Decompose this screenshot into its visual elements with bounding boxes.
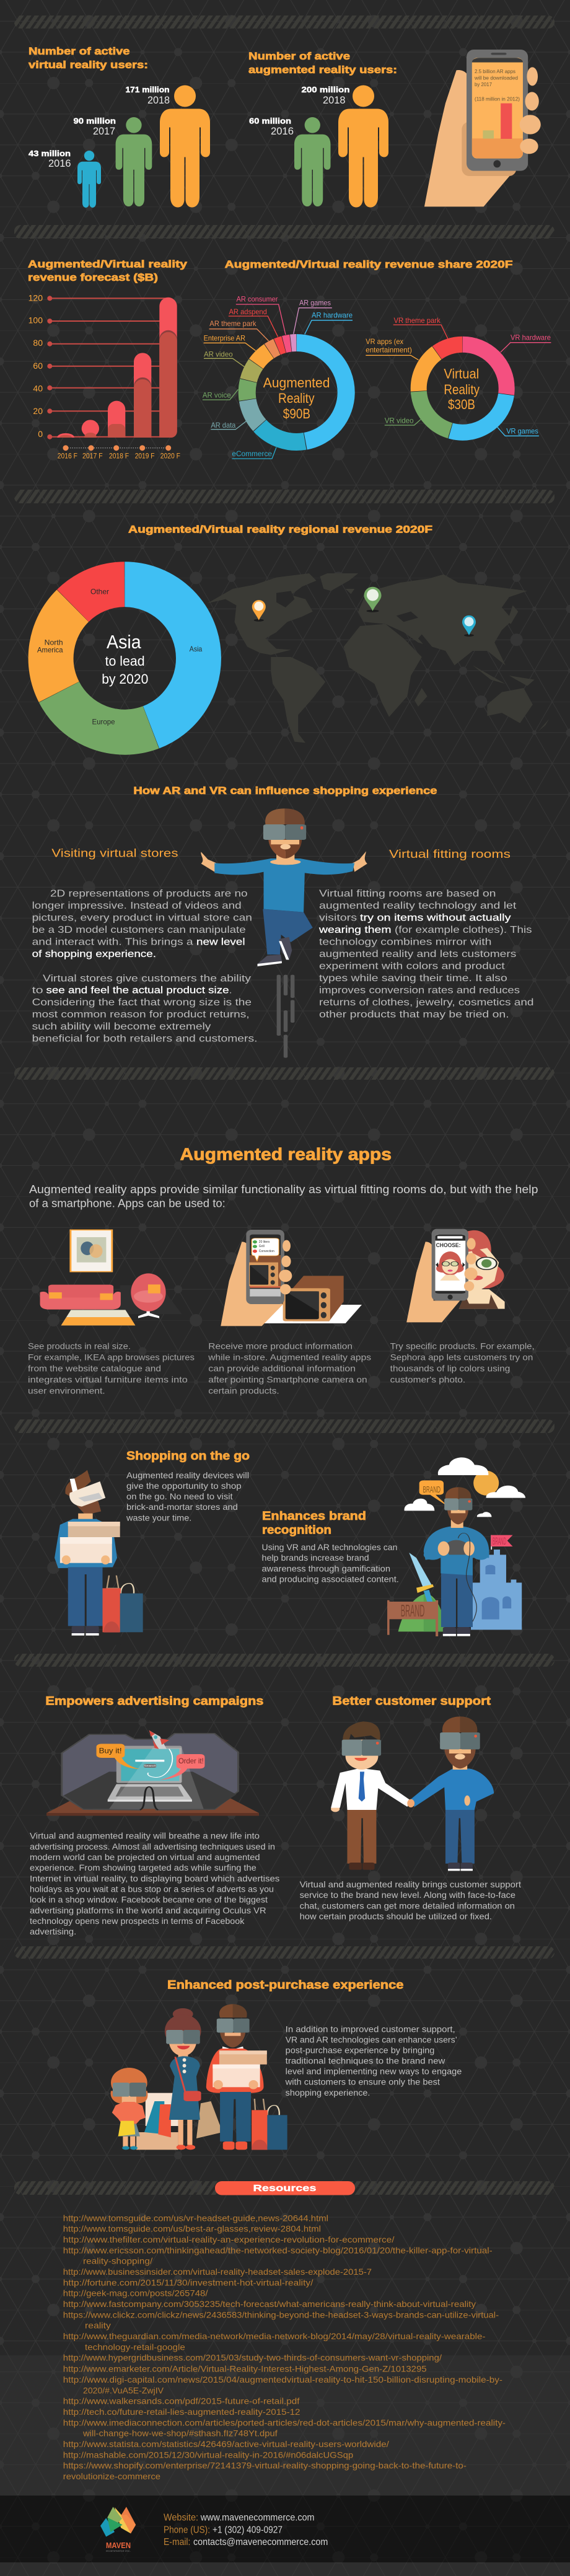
map pin: asia bbox=[462, 615, 476, 637]
text: virtual stores: new level bbox=[196, 937, 245, 947]
text: shopping on the go: Augmented reality devices will bbox=[126, 1470, 249, 1480]
text: try specific products: Try specific products. For example, bbox=[390, 1341, 535, 1351]
illustration: furniture in room bbox=[40, 1230, 182, 1325]
text: virtual stores bbox=[32, 889, 257, 1044]
logo: Maven ecommerce: ecommerce inc. bbox=[106, 2549, 131, 2552]
text: customer support: how certain products should be utilized or fixed. bbox=[300, 1912, 492, 1921]
chart: y axis labels: 40 bbox=[33, 383, 43, 393]
donut center: Augmented Reality $90B: $90B bbox=[283, 406, 310, 421]
ad bubble text: Search bbox=[144, 1764, 156, 1767]
list: resource links: revolutionize-commerce bbox=[63, 2471, 160, 2481]
logo: Maven ecommerce: MAVEN bbox=[106, 2541, 131, 2550]
panel: virtual reality users bbox=[28, 45, 210, 208]
text: see products in real size bbox=[28, 1341, 195, 1396]
text: shopping on the go: give the opportunity to shop bbox=[126, 1481, 242, 1491]
stat: 43 million 2016: 43 million bbox=[28, 149, 71, 158]
list: resource links: http://www.fastcompany.com/3053235/tech-forecast/what-americans-really-think-about-virtual-reality bbox=[63, 2299, 476, 2309]
chart: y axis labels: 60 bbox=[33, 361, 43, 371]
phone screen label: CHOOSE: bbox=[436, 1242, 461, 1248]
heading: enhances brand recognition bbox=[262, 1510, 366, 1537]
chart: augmented reality donut bbox=[227, 322, 367, 462]
text: post-purchase: with customers to ensure only the best bbox=[285, 2077, 440, 2087]
list: resource links: https://www.clickz.com/clickz/news/2436583/thinking-beyond-the-headset-3-ways-brands-can-utilize-virtual- bbox=[63, 2309, 499, 2319]
text: post-purchase: traditional techniques to the brand new bbox=[286, 2055, 445, 2065]
illustration: laptop ads in VR view bbox=[46, 1731, 259, 1815]
donut center: Virtual Reality $30B: Virtual bbox=[444, 366, 479, 382]
text: fitting rooms bbox=[318, 889, 534, 1020]
stat: 90 million 2017 bbox=[73, 116, 116, 137]
list: resource links: https://www.shopify.com/enterprise/72141379-virtual-reality-shopping-going-back-to-the-future-to- bbox=[63, 2461, 467, 2471]
text: customer support: service to the brand new level. Along with face-to-face bbox=[300, 1890, 515, 1900]
icon: person AR 2016 bbox=[294, 117, 331, 206]
list: resource links: http://www.theguardian.com/media-network/media-network-blog/2014/may/28/virtual-reality-wearable- bbox=[63, 2331, 486, 2341]
illustration: man in VR headset bbox=[201, 808, 367, 1058]
phone checklist text: Convection bbox=[259, 1250, 274, 1253]
heading: revenue share 2020F: Augmented/Virtual reality revenue share 2020F bbox=[225, 258, 513, 270]
text: fitting rooms: technology combines mirror with bbox=[319, 937, 491, 947]
text: see products in real size: For example, IKEA app browses pictures bbox=[28, 1352, 195, 1362]
text: try specific products: Sephora app lets customers try on bbox=[390, 1352, 533, 1362]
panel: shopping on the go bbox=[55, 1450, 250, 1645]
phone checklist text bbox=[259, 1240, 274, 1253]
text: fitting rooms: other products that may be tried on. bbox=[319, 1009, 509, 1020]
stat: 60 million 2016: 60 million bbox=[249, 116, 291, 125]
brand labels bbox=[401, 1484, 506, 1620]
heading: augmented reality apps: Augmented reality apps bbox=[180, 1145, 392, 1164]
text: virtual stores: beneficial for both retailers and customers. bbox=[32, 1034, 257, 1044]
text: post-purchase: level and implementing new ways to engage bbox=[286, 2067, 462, 2076]
chart: regional donut bbox=[20, 554, 229, 763]
text: post-purchase: post-purchase experience by bringing bbox=[286, 2045, 434, 2055]
stat: 200 million 2018: 200 million bbox=[301, 85, 350, 94]
donut segment labels bbox=[37, 587, 203, 726]
phone checklist text: 20 liters bbox=[259, 1240, 270, 1244]
chart: y axis labels bbox=[28, 293, 43, 439]
text: virtual stores: see and feel the actual product size bbox=[46, 986, 229, 996]
chart: y axis labels: 20 bbox=[33, 406, 43, 416]
text: receive more product information: while in-store. Augmented reality apps bbox=[208, 1352, 371, 1362]
text: fitting rooms: experiment with colors and product bbox=[319, 961, 505, 972]
chart: y axis labels: 0 bbox=[38, 429, 43, 439]
heading: regional revenue: Augmented/Virtual reality regional revenue 2020F bbox=[128, 523, 432, 535]
illustration: two men shaking hands in VR bbox=[331, 1716, 494, 1871]
text: virtual stores: . bbox=[229, 986, 232, 996]
heading: number of active AR users bbox=[248, 50, 397, 76]
stat: 90 million 2017: 2017 bbox=[93, 125, 115, 137]
text: advertising: advertising process. Almost all advertising techniques used in bbox=[30, 1842, 275, 1851]
donut segment labels: America bbox=[37, 645, 63, 654]
panel: better customer support bbox=[300, 1695, 521, 1921]
panel: how AR and VR influence shopping bbox=[32, 785, 534, 1058]
text: virtual stores: 2D representations of products are no bbox=[50, 889, 248, 899]
donut center: Augmented Reality $90B: Augmented bbox=[263, 375, 330, 390]
chart: x axis: 2018 F bbox=[109, 452, 129, 460]
text: virtual stores: such ability will become extremely bbox=[32, 1021, 211, 1032]
list: resource links: reality-shopping/ bbox=[83, 2256, 152, 2266]
text: advertising: Internet in virtual reality, to displaying board which advertises bbox=[30, 1873, 279, 1883]
AR leader labels: AR adspend bbox=[229, 307, 267, 316]
text: receive more product information: after pointing Smartphone camera on bbox=[208, 1375, 367, 1385]
icon: person AR 2018 bbox=[338, 86, 388, 207]
text: fitting rooms: visitors bbox=[319, 912, 357, 924]
list: resource links: http://www.tomsguide.com/us/best-ar-glasses,review-2804.html bbox=[63, 2224, 321, 2234]
text: intro: Augmented reality apps provide similar functionality as virtual fitting rooms do, but with the help bbox=[29, 1183, 538, 1196]
illustration: phone pointed at TV bbox=[221, 1230, 362, 1326]
text: see products in real size: from the website catalogue and bbox=[28, 1364, 161, 1374]
chart: bar 2019 bbox=[134, 353, 151, 438]
text: receive more product information: Receive more product information bbox=[208, 1341, 353, 1351]
stat: 200 million 2018 bbox=[301, 85, 350, 106]
panel: augmented reality users bbox=[248, 50, 397, 207]
text: receive more product information: certain products. bbox=[208, 1386, 279, 1396]
text: customer support: Virtual and augmented reality brings customer support bbox=[300, 1879, 521, 1889]
chart: x axis: 2019 F bbox=[135, 452, 155, 460]
list: resource links bbox=[63, 2213, 506, 2481]
text: fitting rooms: augmented reality and lets customers bbox=[319, 949, 516, 959]
list: resource links: reality bbox=[85, 2321, 111, 2331]
icon: person 2018 bbox=[160, 86, 210, 207]
illustration: hand holding phone with AR apps chart bbox=[424, 50, 541, 206]
phone screen text: will be downloaded bbox=[474, 74, 518, 81]
panel: revenue forecast bar chart bbox=[28, 258, 188, 460]
panel: revenue share donuts bbox=[203, 258, 551, 462]
VR leader labels: VR games bbox=[506, 426, 538, 435]
text: brand recognition: and producing associated content. bbox=[261, 1574, 399, 1584]
VR leader labels: VR theme park bbox=[394, 316, 441, 325]
stat: 43 million 2016: 2016 bbox=[48, 157, 71, 169]
phone screen text bbox=[474, 68, 520, 102]
text: fitting rooms: Virtual fitting rooms are based on bbox=[319, 889, 496, 899]
AR leader labels: eCommerce bbox=[232, 449, 272, 458]
chart: bar 2017 bbox=[82, 420, 99, 438]
heading: resources band: Resources bbox=[253, 2183, 316, 2194]
text: fitting rooms: augmented reality technology and let bbox=[319, 901, 517, 911]
AR leader labels: AR data bbox=[211, 421, 236, 430]
phone screen text: (118 million in 2012) bbox=[475, 95, 520, 102]
text: fitting rooms: try on items without actually bbox=[360, 912, 511, 924]
map: world bbox=[208, 573, 549, 743]
AR leader labels: AR games bbox=[299, 299, 331, 307]
donut center text: to lead bbox=[105, 653, 145, 669]
heading: resources band bbox=[14, 2181, 555, 2195]
contact details: Website: bbox=[164, 2513, 198, 2523]
ad bubble text: Order it! bbox=[178, 1757, 204, 1765]
icon: person 2017 bbox=[116, 117, 152, 206]
list: resource links: 2020/#.VuA5E-ZwjIV bbox=[83, 2385, 164, 2395]
text: try specific products bbox=[390, 1341, 535, 1385]
phone screen text: 2.5 billion AR apps bbox=[475, 68, 515, 74]
donut segment labels: Other bbox=[90, 587, 109, 596]
heading: revenue forecast: Augmented/Virtual reality bbox=[28, 258, 188, 270]
AR leader labels: AR hardware bbox=[312, 311, 353, 320]
text: fitting rooms: wearing them bbox=[318, 925, 392, 935]
chart: bar 2016 bbox=[57, 433, 74, 438]
text: advertising: advertising. bbox=[30, 1926, 76, 1936]
list: resource links: http://mashable.com/2015/12/30/virtual-reality-in-2016/#n06dalcUGSqp bbox=[63, 2450, 353, 2459]
panel: regional revenue bbox=[20, 523, 549, 763]
donut center text: Asia bbox=[107, 631, 141, 653]
stat: 43 million 2016 bbox=[28, 149, 71, 169]
list: resource links: http://www.ericsson.com/thinkingahead/the-networked-society-blog/2016/01/20/the-killer-app-for-virtual- bbox=[63, 2245, 493, 2255]
list: resource links: http://www.hypergridbusiness.com/2015/03/study-two-thirds-of-consumers-want-vr-shopping/ bbox=[63, 2353, 442, 2363]
illustration: gamer in VR with castle and brand signs: BRAND bbox=[493, 1535, 506, 1547]
heading: enhances brand recognition: recognition bbox=[262, 1524, 331, 1537]
stat: 171 million 2018 bbox=[125, 85, 170, 106]
heading: better customer support: Better customer support bbox=[332, 1695, 491, 1708]
heading: empowers advertising campaigns: Empowers advertising campaigns bbox=[45, 1695, 263, 1708]
chart: x axis: 2016 F bbox=[58, 452, 77, 460]
text: try specific products: thousands of lip colors using bbox=[390, 1364, 510, 1374]
panel: augmented reality apps bbox=[28, 1145, 538, 1396]
donut center: Augmented Reality $90B bbox=[263, 375, 330, 421]
text: advertising: modern world can be projected on virtual and augmented bbox=[30, 1852, 260, 1862]
donut segment labels: North bbox=[45, 638, 63, 647]
text: shopping on the go: on the go. No need to visit bbox=[126, 1491, 233, 1501]
text: fitting rooms: returns of clothes, jewelry, cosmetics and bbox=[319, 997, 534, 1008]
list: resource links: http://fortune.com/2015/11/30/investment-hot-virtual-reality/ bbox=[63, 2277, 314, 2287]
text: brand recognition bbox=[261, 1542, 399, 1584]
donut center text: by 2020 bbox=[102, 671, 148, 687]
stat: 200 million 2018: 2018 bbox=[323, 94, 346, 106]
text: post-purchase bbox=[285, 2024, 462, 2097]
text: see products in real size: user environment. bbox=[28, 1386, 105, 1396]
chart: y axis labels: 80 bbox=[33, 338, 43, 348]
text: fitting rooms: types while saving their time. It also bbox=[319, 973, 507, 984]
heading: number of active VR users: virtual reality users: bbox=[28, 59, 148, 71]
donut center: Augmented Reality $90B: Reality bbox=[278, 390, 315, 406]
heading: influence on shopping experience: How AR and VR can influence shopping experience bbox=[133, 785, 437, 796]
text: virtual stores: and interact with. This brings a bbox=[32, 937, 193, 947]
text: brand recognition: awareness through gamification bbox=[261, 1563, 390, 1573]
text: shopping on the go: waste your time. bbox=[126, 1512, 191, 1522]
text: virtual stores: longer impressive. Instead of videos and bbox=[32, 901, 242, 911]
donut segment labels: Europe bbox=[92, 717, 115, 726]
donut segment labels: Asia bbox=[190, 645, 203, 653]
text: receive more product information bbox=[208, 1341, 371, 1396]
stat: 171 million 2018: 171 million bbox=[125, 85, 170, 94]
contact details: contacts@mavenecommerce.com bbox=[193, 2537, 328, 2547]
AR leader labels: AR theme park bbox=[209, 319, 256, 328]
panel: enhanced post-purchase experience bbox=[111, 1978, 462, 2150]
text: advertising: holidays as you wait at a bus stop or a series of adverts as you bbox=[30, 1884, 274, 1894]
text: receive more product information: can provide additional information bbox=[208, 1364, 356, 1374]
text: brand recognition: Using VR and AR technologies can bbox=[261, 1542, 397, 1552]
panel: footer bbox=[0, 2495, 570, 2562]
panel: resources bbox=[14, 2181, 555, 2481]
brand labels: BRAND bbox=[401, 1601, 424, 1620]
illustration: gamer in VR with castle and brand signs bbox=[387, 1457, 525, 1636]
contact details: www.mavenecommerce.com bbox=[200, 2513, 315, 2523]
stat: 60 million 2016 bbox=[249, 116, 294, 137]
phone screen text: by 2017 bbox=[475, 81, 492, 87]
AR leader labels: AR consumer bbox=[237, 295, 278, 304]
heading: revenue forecast bbox=[28, 258, 188, 283]
text: advertising: advertising platforms in the world and acquiring Oculus VR bbox=[30, 1905, 266, 1915]
text: virtual stores: of shopping experience. bbox=[32, 949, 156, 959]
donut center: Virtual Reality $30B bbox=[444, 366, 480, 412]
text: virtual stores: be a 3D model customers can manipulate bbox=[32, 925, 246, 935]
list: resource links: http://www.thefilter.com/virtual-reality-an-experience-revolution-for-ecommerce/ bbox=[63, 2234, 395, 2244]
heading: shopping on the go: Shopping on the go bbox=[126, 1450, 250, 1463]
chart: x axis bbox=[58, 445, 180, 460]
illustration: man carrying boxes with shopping bags bbox=[55, 1470, 143, 1645]
chart: virtual reality donut bbox=[401, 327, 524, 450]
chart: bar 2018 bbox=[108, 401, 125, 438]
stat: 90 million 2017: 90 million bbox=[73, 116, 116, 125]
text: customer support: chat, customers can get more detailed information on bbox=[300, 1900, 515, 1910]
text: shopping on the go bbox=[126, 1470, 249, 1522]
text: fitting rooms: (for example clothes). This bbox=[395, 925, 532, 935]
chart: x axis: 2020 F bbox=[160, 452, 180, 460]
ad bubble text bbox=[99, 1746, 204, 1767]
text: shopping on the go: brick-and-mortar stores and bbox=[126, 1502, 238, 1512]
VR leader labels bbox=[366, 316, 551, 436]
text: brand recognition: help brands increase brand bbox=[261, 1553, 369, 1563]
panel: enhances brand recognition bbox=[261, 1457, 525, 1636]
text: virtual stores: pictures, every product in virtual store can bbox=[32, 912, 252, 924]
text: intro bbox=[29, 1183, 538, 1209]
list: resource links: http://www.imediaconnection.com/articles/ported-articles/red-dot-articles/2015/mar/why-augmented-reality- bbox=[63, 2417, 506, 2427]
list: resource links: http://www.emarketer.com/Article/Virtual-Reality-Interest-Highest-Among-Gen-Z/1013295 bbox=[63, 2364, 427, 2374]
list: resource links: technology-retail-google bbox=[85, 2342, 185, 2352]
chart: bar 2020 bbox=[159, 298, 177, 438]
AR leader labels: Enterprise AR bbox=[204, 333, 245, 342]
brand labels: BRAND bbox=[423, 1484, 441, 1495]
heading: number of active AR users: augmented reality users: bbox=[248, 64, 397, 76]
contact details: E-mail: bbox=[164, 2537, 190, 2547]
text: customer support bbox=[300, 1879, 521, 1921]
stat: 60 million 2016: 2016 bbox=[271, 125, 294, 137]
heading: number of active VR users bbox=[28, 45, 148, 71]
text: advertising bbox=[30, 1831, 279, 1936]
VR leader labels: entertainment) bbox=[366, 346, 412, 355]
subheading: visiting virtual stores: Visiting virtual stores bbox=[51, 847, 178, 860]
text: virtual stores: Virtual stores give customers the ability bbox=[43, 973, 251, 984]
text: virtual stores: to bbox=[32, 986, 43, 996]
text: post-purchase: shopping experience. bbox=[286, 2088, 370, 2097]
list: resource links: will-change-how-we-shop/#sthash.fIz748Yt.dpuf bbox=[82, 2428, 278, 2438]
heading: enhances brand recognition: Enhances brand bbox=[262, 1510, 366, 1523]
map pin: europe bbox=[364, 587, 382, 612]
text: post-purchase: In addition to improved customer support, bbox=[286, 2024, 455, 2034]
text: virtual stores: Considering the fact that wrong size is the bbox=[32, 997, 252, 1008]
heading: number of active VR users: Number of active bbox=[28, 45, 130, 57]
list: resource links: http://geek-mag.com/posts/265748/ bbox=[63, 2288, 208, 2298]
VR leader labels: VR apps (ex bbox=[366, 337, 403, 346]
subheading: virtual fitting rooms: Virtual fitting rooms bbox=[389, 848, 511, 860]
chart: gridlines with dots bbox=[48, 296, 170, 439]
donut center text bbox=[102, 631, 148, 687]
text: post-purchase: VR and AR technologies can enhance users’ bbox=[286, 2034, 457, 2044]
illustration: woman trying on product via phone bbox=[406, 1229, 505, 1322]
AR leader labels: AR voice bbox=[203, 391, 231, 400]
heading: post-purchase experience: Enhanced post-purchase experience bbox=[167, 1978, 403, 1992]
AR leader labels: AR video bbox=[204, 350, 233, 359]
list: resource links: http://www.statista.com/statistics/426469/active-virtual-reality-users-worldwide/ bbox=[63, 2439, 389, 2449]
text: advertising: look in a shop window. Facebook became one of the biggest bbox=[30, 1895, 268, 1905]
ad bubble text: Buy it! bbox=[99, 1746, 122, 1755]
text: fitting rooms: improves conversion rates and reduces bbox=[319, 986, 520, 996]
text: try specific products: customer's photo. bbox=[390, 1375, 465, 1385]
heading: revenue forecast: revenue forecast ($B) bbox=[28, 271, 158, 283]
icon: person 2016 bbox=[77, 151, 101, 208]
chart: x axis: 2017 F bbox=[82, 452, 103, 460]
donut center: Virtual Reality $30B: $30B bbox=[448, 397, 475, 412]
text: advertising: experience. From showing targeted ads while surfing the bbox=[30, 1863, 256, 1872]
chart: y axis labels: 100 bbox=[28, 315, 43, 325]
phone checklist text: Grill bbox=[259, 1245, 265, 1248]
logo: Maven ecommerce bbox=[100, 2507, 136, 2552]
text: advertising: technology opens new prospects in terms of Facebook bbox=[30, 1916, 245, 1926]
text: intro: of a smartphone. Apps can be used to: bbox=[29, 1196, 226, 1209]
contact details: Phone (US): bbox=[164, 2525, 210, 2536]
list: resource links: http://www.tomsguide.com/us/vr-headset-guide,news-20644.html bbox=[63, 2213, 328, 2223]
illustration: family with VR headsets and shopping bbox=[111, 2004, 287, 2150]
chart: y axis labels: 120 bbox=[28, 293, 43, 302]
contact details: +1 (302) 409-0927 bbox=[213, 2525, 283, 2536]
list: resource links: http://tech.co/future-retail-lies-augmented-reality-2015-12 bbox=[63, 2407, 300, 2417]
text: see products in real size: integrates virtual furniture items into bbox=[28, 1375, 188, 1385]
list: resource links: http://www.walkersands.com/pdf/2015-future-of-retail.pdf bbox=[63, 2396, 300, 2406]
VR leader labels: VR hardware bbox=[511, 333, 551, 342]
stat: 171 million 2018: 2018 bbox=[147, 94, 170, 106]
map pin: north america bbox=[252, 600, 266, 622]
text: virtual stores: most common reason for product returns, bbox=[32, 1009, 250, 1020]
contact details bbox=[164, 2513, 328, 2547]
AR leader labels bbox=[203, 295, 353, 459]
VR leader labels: VR video bbox=[385, 417, 414, 425]
list: resource links: http://www.digi-capital.com/news/2015/04/augmentedvirtual-reality-to-hit-150-billion-disrupting-mobile-by- bbox=[63, 2375, 502, 2384]
text: see products in real size: See products in real size. bbox=[28, 1341, 131, 1351]
list: resource links: http://www.businessinsider.com/virtual-reality-headset-sales-explode-2015-7 bbox=[63, 2267, 372, 2277]
panel: empowers advertising campaigns bbox=[30, 1695, 279, 1936]
heading: number of active AR users: Number of active bbox=[248, 50, 350, 62]
donut center: Virtual Reality $30B: Reality bbox=[444, 382, 480, 397]
text: advertising: Virtual and augmented reality will breathe a new life into bbox=[30, 1831, 260, 1841]
